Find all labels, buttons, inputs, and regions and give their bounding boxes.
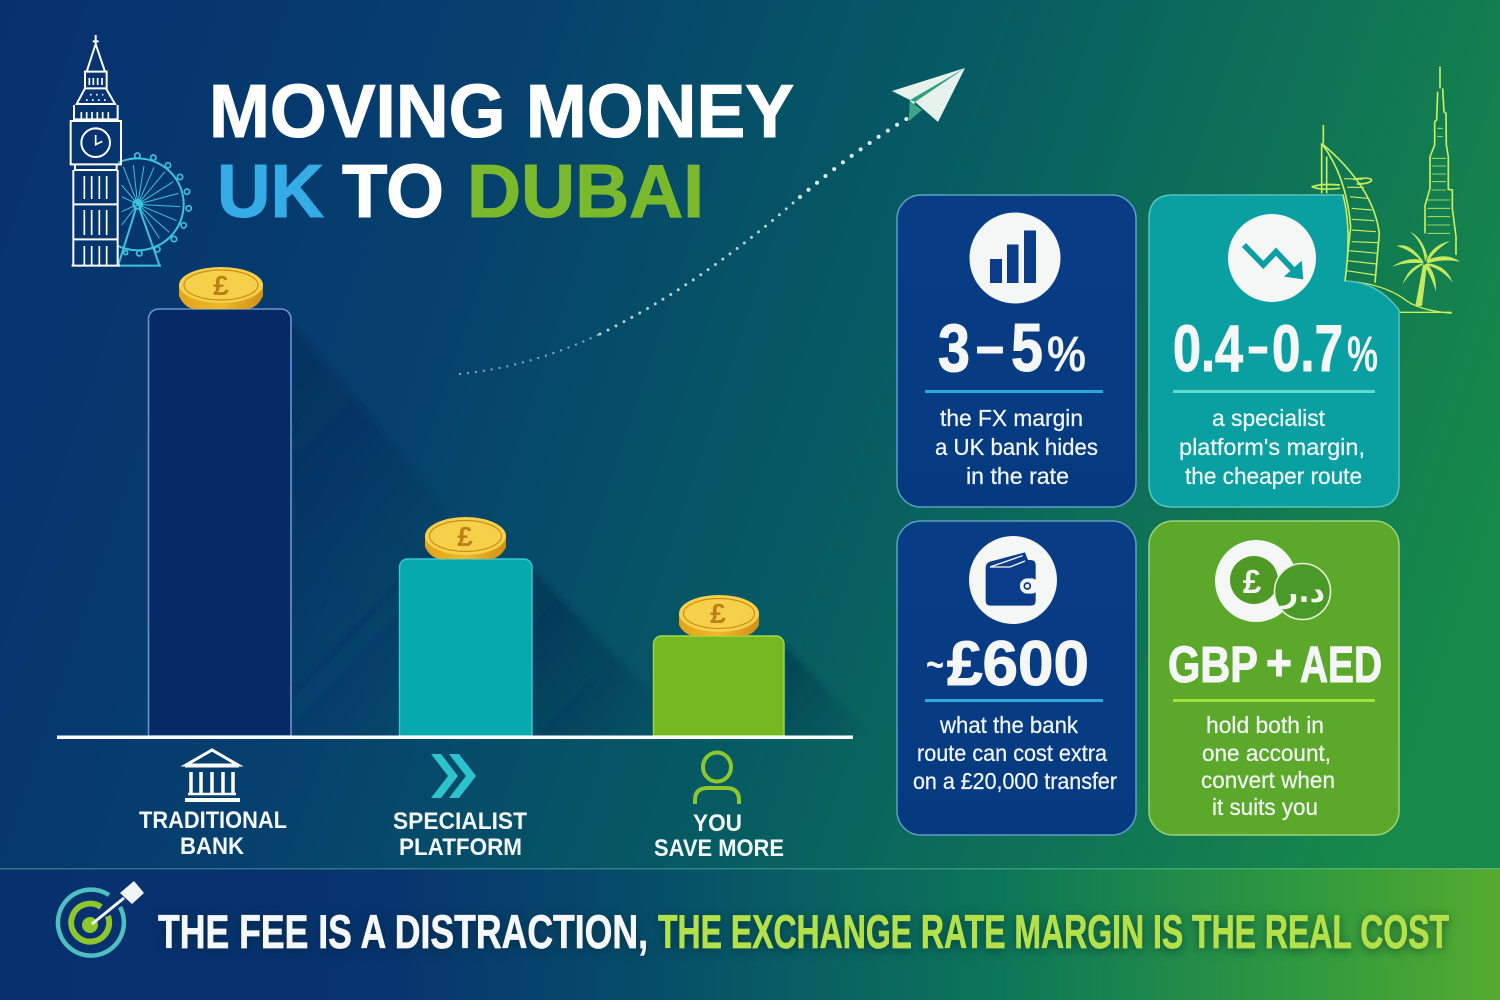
description: platform's margin, (1179, 434, 1365, 460)
stat value (1173, 311, 1378, 385)
stat card: FX margin (897, 195, 1136, 507)
palm tree (1392, 232, 1460, 306)
stat value: % (1047, 326, 1086, 382)
coin on you bar: £ (710, 598, 726, 629)
divider (925, 390, 1103, 393)
description (1179, 405, 1365, 489)
description (913, 712, 1117, 794)
coin on bank bar: £ (213, 270, 229, 301)
stat card: extra cost (897, 521, 1136, 835)
panel (897, 195, 1136, 507)
bottom banner (0, 868, 1500, 1000)
description: the FX margin (940, 405, 1083, 431)
icon: bar chart (970, 212, 1060, 304)
label: TRADITIONAL (139, 807, 287, 834)
description: on a £20,000 transfer (913, 768, 1117, 794)
icon: falling arrow (1228, 214, 1316, 302)
icon: London Eye (118, 152, 192, 267)
category: you save more: SAVE MORE (654, 835, 784, 862)
stat value: 0.4 (1173, 311, 1243, 385)
banner top edge (0, 868, 1500, 870)
category: you save more (654, 752, 784, 862)
label: SPECIALIST (393, 808, 527, 835)
category: specialist platform: PLATFORM (399, 834, 522, 861)
description: route can cost extra (917, 740, 1107, 766)
stat value: £600 (947, 629, 1089, 699)
dotted flight path (460, 118, 908, 374)
description (1201, 712, 1335, 820)
icon: person (695, 752, 739, 804)
banner background (0, 868, 1500, 1000)
banner statement white: THE FEE IS A DISTRACTION, (158, 905, 648, 958)
stat value (938, 310, 1086, 386)
divider (1173, 390, 1375, 393)
description: a specialist (1212, 405, 1326, 431)
category: specialist platform (393, 754, 527, 861)
coin on platform bar (425, 517, 506, 559)
panel (1149, 195, 1399, 507)
description: convert when (1201, 767, 1335, 793)
icon: pound and dirham coins: £ (1243, 563, 1262, 600)
coin on bank bar (179, 267, 263, 309)
sail overlap (1343, 195, 1348, 281)
divider (1173, 699, 1375, 702)
coin on platform bar: £ (457, 521, 473, 552)
stat card: specialist margin (1149, 195, 1399, 507)
description: it suits you (1212, 794, 1318, 820)
description (935, 405, 1098, 489)
title word UK: UK (217, 149, 324, 233)
bar: specialist platform (400, 559, 532, 736)
stat card: hold both currencies (1149, 521, 1399, 835)
coin on you bar (679, 595, 759, 636)
stat value: GBP (1168, 636, 1258, 693)
icon: wallet (969, 536, 1057, 624)
bar: traditional bank (148, 309, 291, 736)
title word TO: TO (342, 149, 444, 233)
icon: Burj Khalifa, Burj Al Arab and palm (1312, 67, 1460, 313)
stat value: – (976, 312, 1004, 379)
stat value: ~ (926, 643, 944, 687)
stat value: 3 (938, 310, 970, 386)
stat value (1168, 634, 1382, 693)
description: a UK bank hides (935, 434, 1098, 460)
stat value: 0.7 (1272, 311, 1343, 385)
description: in the rate (966, 463, 1069, 489)
icon: pound and dirham coins (1215, 540, 1330, 622)
category: traditional bank: BANK (180, 833, 245, 860)
stat value: – (1248, 312, 1268, 379)
stat value: % (1347, 326, 1378, 382)
stat value: + (1266, 634, 1292, 691)
icon: chevrons (431, 754, 476, 798)
icon: paper plane (892, 68, 965, 122)
stat value: AED (1300, 636, 1382, 693)
description: one account, (1202, 740, 1331, 766)
divider (925, 699, 1103, 702)
chart baseline (57, 736, 853, 739)
panel (897, 521, 1136, 835)
panel (1149, 521, 1399, 835)
title (209, 69, 794, 233)
description: hold both in (1206, 712, 1324, 738)
title word DUBAI: DUBAI (467, 149, 704, 233)
icon: bank (185, 750, 240, 800)
description: what the bank (939, 712, 1078, 738)
description: the cheaper route (1185, 463, 1362, 489)
category: traditional bank (139, 750, 287, 860)
icon: target and arrow (58, 881, 144, 956)
stat value: 5 (1011, 310, 1043, 386)
bar: you save more (654, 636, 784, 736)
icon: Big Ben and London Eye (71, 35, 191, 266)
icon: pound and dirham coins: د.ر (1279, 575, 1325, 610)
bar shadows (291, 322, 870, 736)
label: YOU (693, 810, 742, 837)
title line one: MOVING MONEY (209, 69, 794, 153)
